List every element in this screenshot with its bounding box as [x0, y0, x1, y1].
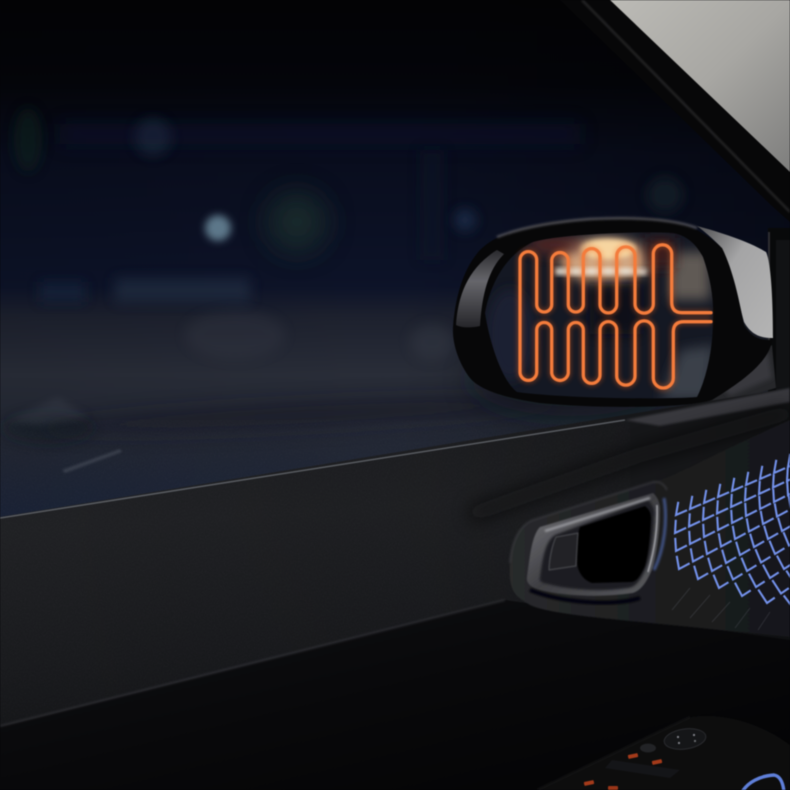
reflection: red brown left [527, 235, 583, 255]
door upper panel [0, 388, 790, 790]
dark right road [471, 381, 624, 418]
orange indicator 1 [628, 753, 638, 759]
handle inner recess [540, 500, 654, 590]
faded line 3 [712, 602, 730, 622]
reflection: brown right [670, 252, 710, 300]
pillar light panel [610, 0, 790, 172]
side mirror [453, 217, 776, 410]
speaker faded lines [672, 588, 770, 630]
pillar inner edge [582, 0, 790, 212]
mirror base under housing [690, 345, 776, 410]
handle top chrome highlight [545, 498, 650, 531]
knob dot 4 [694, 740, 696, 742]
window view: blurred night street [0, 101, 790, 518]
bezel panel [510, 420, 790, 637]
handle right chrome highlight [648, 505, 657, 572]
glass base [480, 228, 720, 403]
reflection: warm lights [559, 238, 651, 282]
housing top rim highlight [497, 218, 697, 237]
reflection: dark middle [590, 284, 640, 334]
bezel top edge light [510, 482, 667, 563]
a-pillar: black trim and light headliner [560, 0, 790, 222]
handle chrome surround [527, 493, 660, 596]
reflection: bright centre [580, 239, 636, 259]
distant blue band [68, 126, 572, 142]
reflection on road right [418, 329, 447, 352]
right door frame post [768, 228, 790, 398]
bokeh light: pale blue [205, 215, 231, 241]
mirror glass [480, 228, 720, 403]
street light right [454, 209, 476, 231]
door handle bezel and speaker panel [510, 420, 790, 637]
reflection: red right [645, 238, 675, 268]
soft shadow band above handle [470, 412, 790, 515]
door lower pocket [0, 600, 790, 790]
knob dot 1 [677, 736, 679, 738]
black housing [453, 217, 772, 407]
bokeh light: upper blue [135, 119, 171, 155]
small button [640, 744, 656, 752]
faded line 4 [735, 608, 750, 628]
right green light [650, 180, 680, 210]
sill light trim [625, 388, 790, 426]
road streak [20, 401, 79, 423]
faded line 1 [672, 588, 690, 610]
heating element glow [520, 245, 711, 388]
reflection: lower right road [660, 345, 715, 400]
door surface [0, 388, 790, 790]
street glow band [115, 278, 250, 302]
orange indicator 4 [608, 786, 618, 790]
frame inner strip [776, 240, 790, 390]
silver body [697, 226, 773, 338]
window sill highlight [0, 420, 625, 518]
door darkening to the right [0, 388, 790, 790]
pillar black trim [560, 0, 790, 222]
street glow left [42, 282, 83, 300]
handle blue edge glow [654, 498, 666, 570]
speaker pattern: blue chevrons [675, 452, 790, 609]
crease highlight [0, 600, 505, 726]
lower pocket surface [0, 600, 790, 790]
faded line 5 [758, 612, 770, 630]
blue accent light [742, 775, 784, 790]
switch bar [605, 760, 680, 778]
frame edge [768, 232, 770, 362]
bokeh light: green halo [267, 192, 327, 252]
switch panel edge [537, 717, 690, 790]
window switch panel [537, 716, 790, 790]
reflection: left blue [488, 291, 532, 378]
bokeh light: left green [16, 112, 40, 167]
road streak lower [62, 449, 122, 473]
knob dot 2 [693, 734, 695, 736]
knob dot 3 [678, 742, 680, 744]
orange indicator 2 [652, 759, 662, 765]
leather grain [0, 420, 630, 725]
road shadow left [14, 422, 65, 440]
darker lane on road [112, 400, 472, 429]
handle cavity [577, 506, 651, 583]
left rim reflection [456, 250, 504, 327]
mirror adjust knob [663, 726, 707, 752]
faded line 2 [690, 595, 710, 618]
reflection: white streak [555, 268, 647, 275]
handle bottom shadow [530, 590, 640, 603]
handle lever [549, 533, 578, 570]
pale reflection on road [210, 320, 255, 325]
dark vertical post [420, 150, 444, 260]
mirror base highlight [720, 352, 772, 396]
switch panel surface [537, 716, 790, 790]
heating element line [520, 245, 711, 388]
frame dark fill [768, 228, 790, 398]
side vignette [622, 164, 790, 414]
orange indicator 3 [584, 780, 594, 786]
